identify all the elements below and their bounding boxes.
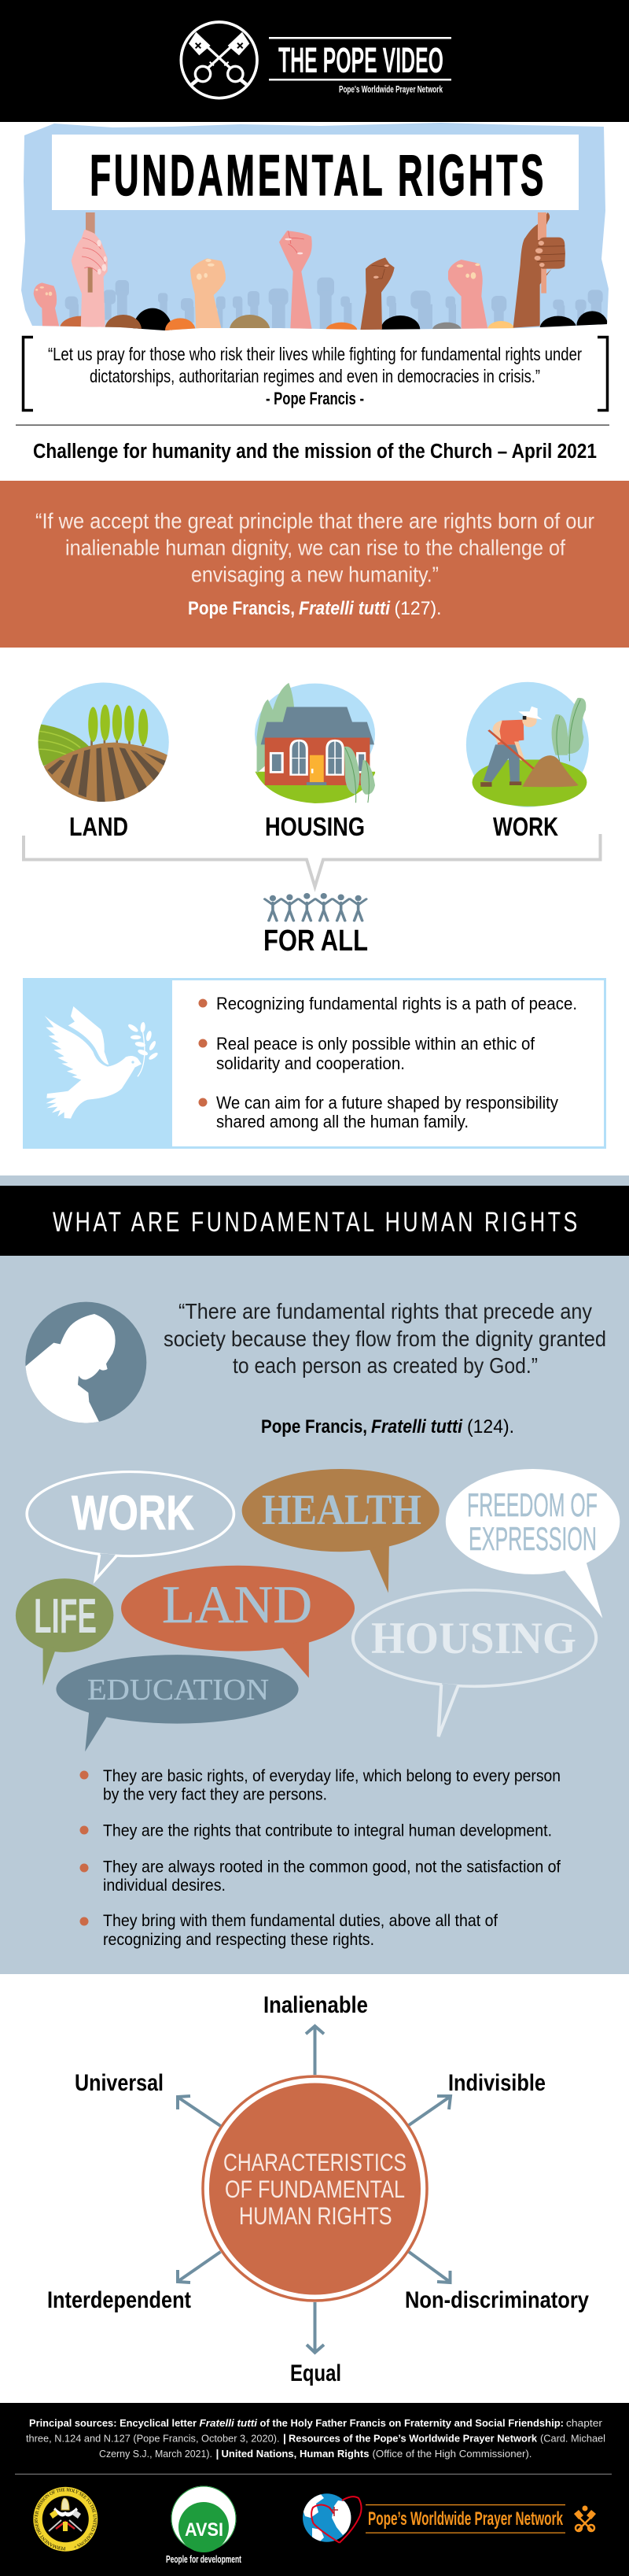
pope quote with brackets: - Pope Francis - bbox=[266, 389, 364, 408]
sources: three, N.124 and N.127 (Pope Francis, October 3, 2020). bbox=[26, 2433, 280, 2444]
logo tagline: Pope's Worldwide Prayer Network bbox=[339, 83, 443, 94]
section heading: WHAT ARE FUNDAMENTAL HUMAN RIGHTS bbox=[53, 1206, 577, 1238]
quote bbox=[164, 1299, 606, 1378]
logo: holy see mission seal: PERMANENT OBSERVER MISSION OF THE HOLY SEE TO THE UNITED NATIONS + bbox=[35, 2488, 97, 2551]
bullet list: what rights are: by the very fact they are persons. bbox=[103, 1786, 327, 1803]
panel: orange quote: (127). bbox=[395, 598, 442, 619]
speech bubbles: LAND bbox=[162, 1574, 312, 1634]
bullet list: what rights are: They are basic rights, of everyday life, which belong to every person bbox=[103, 1767, 561, 1785]
sources: Resources of the Pope’s Worldwide Prayer Network bbox=[289, 2433, 538, 2444]
quote attribution: (124). bbox=[467, 1416, 514, 1437]
panel: peace bbox=[23, 978, 605, 1149]
logo: avsi: AVSI bbox=[185, 2519, 223, 2541]
icon: land bbox=[36, 683, 171, 806]
panel: orange quote: Pope Francis, bbox=[188, 598, 295, 619]
quote: to each person as created by God.” bbox=[233, 1353, 538, 1378]
labels: land housing work: HOUSING bbox=[265, 812, 365, 841]
pope quote with brackets bbox=[24, 337, 607, 411]
bullet list: peace: Recognizing fundamental rights is a path of peace. bbox=[216, 994, 577, 1013]
sources: Fratelli tutti bbox=[200, 2417, 257, 2429]
icon: dove bbox=[45, 1006, 159, 1119]
speech bubbles: HOUSING bbox=[371, 1614, 576, 1663]
quote: “There are fundamental rights that precede any bbox=[178, 1299, 592, 1323]
central circle: HUMAN RIGHTS bbox=[239, 2201, 392, 2230]
panel: orange quote: envisaging a new humanity.” bbox=[191, 562, 439, 587]
header band bbox=[0, 0, 629, 122]
central circle: OF FUNDAMENTAL bbox=[225, 2175, 405, 2203]
diagram: characteristics bbox=[47, 1992, 589, 2386]
icon: crossed keys logo bbox=[181, 22, 257, 98]
central circle bbox=[203, 2076, 427, 2301]
sources: (Office of the High Commissioner). bbox=[373, 2448, 532, 2460]
title: FUNDAMENTAL RIGHTS bbox=[90, 144, 543, 208]
quote attribution: Fratelli tutti bbox=[371, 1416, 463, 1437]
bullet list: what rights are bbox=[80, 1767, 561, 1949]
bullet list: what rights are: They are always rooted in the common good, not the satisfaction of bbox=[103, 1858, 561, 1876]
bullet list: peace: We can aim for a future shaped by responsibility bbox=[216, 1093, 558, 1113]
labels: land housing work bbox=[69, 812, 558, 841]
bullet list: peace: Real peace is only possible within an ethic of bbox=[216, 1034, 535, 1054]
sources bbox=[26, 2417, 605, 2460]
logo: pope's worldwide prayer network bbox=[303, 2493, 596, 2543]
speech bubbles bbox=[16, 1469, 620, 1751]
labels: land housing work: LAND bbox=[69, 812, 128, 841]
bullet list: peace bbox=[198, 994, 577, 1131]
icon: linked people bbox=[265, 893, 366, 921]
labels: Indivisible bbox=[448, 2070, 546, 2096]
panel: orange quote: Fratelli tutti bbox=[299, 598, 391, 619]
sources: | bbox=[215, 2447, 219, 2460]
labels bbox=[47, 1992, 589, 2386]
quote attribution bbox=[261, 1416, 514, 1437]
logo: avsi bbox=[166, 2486, 242, 2565]
bullet list: what rights are: recognizing and respecting these rights. bbox=[103, 1931, 374, 1949]
icon: work bbox=[466, 682, 589, 807]
bracket arrow to for all bbox=[24, 834, 601, 887]
bullet list: what rights are: individual desires. bbox=[103, 1877, 226, 1895]
quote attribution: Pope Francis, bbox=[261, 1416, 367, 1437]
banner sign bbox=[52, 135, 579, 210]
sources: of the Holy Father Francis on Fraternity and Social Friendship: bbox=[259, 2417, 564, 2429]
bullet list: what rights are: They are the rights that contribute to integral human development. bbox=[103, 1822, 552, 1840]
icon: pope silhouette bbox=[20, 1302, 146, 1430]
sources: Principal sources: Encyclical letter bbox=[29, 2417, 197, 2429]
central circle: CHARACTERISTICS bbox=[223, 2148, 406, 2176]
logo: avsi: People for development bbox=[166, 2554, 242, 2565]
icon: housing bbox=[255, 683, 375, 803]
sources: (Card. Michael bbox=[540, 2433, 605, 2444]
speech bubbles: WORK bbox=[72, 1486, 194, 1541]
sources: Czerny S.J., March 2021). bbox=[99, 2448, 212, 2460]
speech bubbles: LIFE bbox=[34, 1589, 97, 1644]
bullet list: what rights are: They bring with them fundamental duties, above all that of bbox=[103, 1912, 498, 1930]
labels: Interdependent bbox=[47, 2287, 191, 2313]
labels: Equal bbox=[290, 2360, 341, 2386]
panel: what are fundamental human rights bbox=[0, 1175, 629, 1974]
labels: Universal bbox=[75, 2070, 164, 2096]
labels: Inalienable bbox=[263, 1992, 368, 2018]
illustration: protest hands banner bbox=[21, 123, 609, 352]
sources: chapter bbox=[566, 2417, 603, 2429]
bullet list: peace: shared among all the human family. bbox=[216, 1112, 469, 1131]
speech bubbles: EDUCATION bbox=[87, 1674, 269, 1707]
arrows bbox=[178, 2026, 451, 2353]
sources: | bbox=[283, 2431, 286, 2444]
panel: orange quote bbox=[0, 481, 629, 648]
footer bbox=[0, 2403, 629, 2576]
logo wordmark: THE POPE VIDEO bbox=[278, 40, 443, 80]
speech bubbles: HEALTH bbox=[262, 1485, 421, 1533]
for all heading: FOR ALL bbox=[263, 924, 368, 958]
panel: orange quote: inalienable human dignity, we can rise to the challenge of bbox=[65, 535, 565, 560]
sources: United Nations, Human Rights bbox=[222, 2448, 370, 2460]
bullet list: peace: solidarity and cooperation. bbox=[216, 1054, 405, 1073]
labels: Non-discriminatory bbox=[405, 2287, 589, 2313]
labels: land housing work: WORK bbox=[493, 812, 558, 841]
